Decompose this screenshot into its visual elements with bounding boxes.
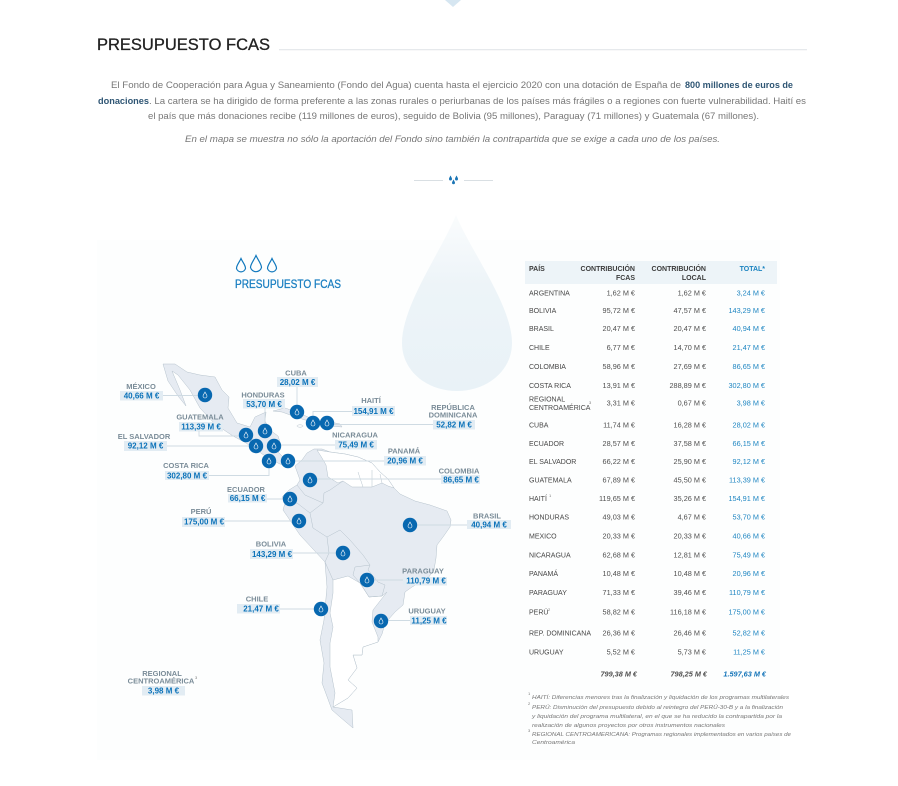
callout: Nicaragua — [267, 430, 378, 453]
row: Panamá: 20,96 M € — [733, 569, 765, 578]
footnotes: HAITÍ: Diferencias menores tras la finalización y liquidación de los programas multilaterales — [532, 694, 789, 701]
table header: LOCAL — [682, 275, 707, 282]
callout: Regional Centroamérica: REGIONAL — [142, 669, 182, 678]
table header: PAÍS — [529, 264, 545, 273]
row: Argentina — [529, 288, 765, 298]
row: México: 40,66 M € — [733, 532, 765, 540]
callout: Ecuador: 66,15 M € — [230, 494, 266, 503]
row: Paraguay: 110,79 M € — [729, 588, 765, 597]
row: Ecuador — [529, 439, 765, 448]
row: Panamá: PANAMÁ — [529, 569, 558, 578]
callout: Bolivia — [250, 540, 350, 560]
row: Regional Centroamérica: 0,67 M € — [678, 398, 706, 408]
row: Rep. Dominicana: 26,36 M € — [603, 628, 635, 638]
row: Regional Centroamérica: CENTROAMÉRICA — [529, 403, 591, 412]
row: Uruguay: URUGUAY — [529, 650, 564, 656]
row: Uruguay — [529, 648, 765, 656]
row: totals: 1.597,63 M € — [723, 670, 767, 678]
row: Brasil: BRASIL — [529, 326, 554, 333]
row: Cuba — [529, 420, 765, 430]
row: Argentina: 1,62 M € — [678, 288, 706, 298]
row: Regional Centroamérica: 3,98 M € — [737, 398, 765, 408]
row: Cuba: 28,02 M € — [733, 420, 765, 430]
row: Cuba: 11,74 M € — [603, 420, 635, 430]
footnotes — [528, 691, 792, 746]
row: Bolivia: 47,57 M € — [674, 306, 706, 315]
row: Bolivia — [529, 306, 765, 315]
callout: Chile: CHILE — [246, 594, 268, 604]
row: Chile: CHILE — [529, 345, 550, 352]
row: Honduras: HONDURAS — [529, 514, 569, 522]
row: Rep. Dominicana: 26,46 M € — [674, 628, 706, 638]
row: El Salvador: EL SALVADOR — [529, 459, 576, 466]
callout: Colombia: 86,65 M € — [443, 476, 479, 484]
callout: Panamá — [281, 446, 426, 468]
row: Argentina: 3,24 M € — [737, 288, 765, 298]
callout: Costa Rica — [163, 454, 276, 480]
callout: República Dominicana: DOMINICANA — [429, 410, 478, 420]
row: Haití: 119,65 M € — [599, 494, 635, 503]
callout: Brasil — [403, 512, 511, 532]
row: Costa Rica: 302,80 M € — [728, 381, 765, 390]
callout: Panamá: PANAMÁ — [388, 446, 421, 456]
row: Guatemala: 113,39 M € — [729, 476, 765, 484]
callout: Paraguay: PARAGUAY — [402, 566, 444, 576]
callout: Honduras: HONDURAS — [241, 390, 285, 400]
row: Nicaragua: 75,49 M € — [733, 550, 765, 560]
row: Uruguay: 11,25 M € — [733, 648, 765, 656]
callout: Regional Centroamérica: CENTROAMÉRICA — [128, 676, 195, 686]
callout: Nicaragua: NICARAGUA — [332, 430, 378, 440]
divider with droplets icon — [414, 176, 493, 184]
row: Brasil: 40,94 M € — [733, 324, 765, 333]
row: Ecuador: ECUADOR — [529, 441, 564, 448]
row: Paraguay: PARAGUAY — [529, 590, 567, 597]
row: Perú: 58,82 M € — [603, 608, 635, 616]
callout: Panamá: 20,96 M € — [387, 456, 423, 466]
row: Regional Centroamérica: 3 — [589, 400, 592, 405]
row: El Salvador — [529, 457, 765, 466]
row: Brasil: 20,47 M € — [603, 324, 635, 333]
callout: El Salvador: EL SALVADOR — [118, 432, 171, 441]
footnotes: 1 — [528, 691, 531, 696]
callout: México — [120, 382, 212, 402]
row: Rep. Dominicana — [529, 628, 765, 638]
italic note: En el mapa se muestra no sólo la aportación del Fondo sino también la contrapartida que se exige a cada uno de los países. — [185, 133, 720, 144]
top pointer triangle — [445, 0, 461, 7]
footnotes: Centroamérica — [532, 740, 576, 746]
callout: El Salvador — [118, 432, 263, 453]
callout: México: MÉXICO — [126, 382, 156, 391]
callout: Costa Rica: COSTA RICA — [163, 461, 209, 470]
row: Bolivia: 143,29 M € — [728, 306, 765, 315]
infographic panel background — [97, 240, 780, 760]
callout: Uruguay — [374, 606, 447, 628]
callout: México: 40,66 M € — [124, 392, 160, 400]
callout: Guatemala: 113,39 M € — [181, 422, 221, 432]
callout: Chile — [237, 594, 328, 616]
row: Uruguay: 5,52 M € — [607, 648, 635, 656]
row: Perú: 116,18 M € — [670, 608, 706, 616]
row: Perú: 2 — [548, 607, 551, 612]
footnotes: 2 — [528, 701, 531, 706]
table header: TOTAL* — [740, 266, 765, 273]
row: Costa Rica: 13,91 M € — [603, 381, 635, 390]
table header: FCAS — [616, 275, 635, 282]
row: Panamá: 10,48 M € — [603, 569, 635, 578]
row: Nicaragua — [529, 550, 765, 560]
row: El Salvador: 25,90 M € — [674, 457, 706, 466]
callout: Bolivia: BOLIVIA — [256, 540, 287, 548]
row: Rep. Dominicana: 52,82 M € — [733, 628, 765, 638]
row: Guatemala — [529, 476, 765, 484]
row: Chile: 6,77 M € — [607, 343, 635, 352]
callout: Cuba: CUBA — [285, 368, 307, 378]
panel title with three drops: PRESUPUESTO FCAS — [235, 277, 341, 291]
row: Chile: 14,70 M € — [674, 343, 706, 352]
row: Costa Rica: 288,89 M € — [669, 381, 706, 390]
callout: Uruguay: URUGUAY — [408, 606, 446, 616]
callout: Cuba: 28,02 M € — [280, 378, 316, 387]
row: Honduras: 53,70 M € — [733, 512, 765, 522]
table header — [525, 261, 777, 284]
callout: Bolivia: 143,29 M € — [252, 550, 293, 559]
row: Haití — [529, 493, 765, 503]
callout: Uruguay: 11,25 M € — [411, 616, 447, 626]
row: totals: 798,25 M € — [670, 670, 708, 678]
row: Argentina: 1,62 M € — [607, 288, 635, 298]
intro text block: donaciones — [98, 95, 149, 106]
row: Honduras: 49,03 M € — [603, 512, 635, 522]
callout: El Salvador: 92,12 M € — [128, 442, 164, 450]
row: Haití: HAITÍ — [529, 494, 547, 503]
row: Brasil: 20,47 M € — [674, 324, 706, 333]
row: México: 20,33 M € — [674, 532, 706, 540]
row: Rep. Dominicana: REP. DOMINICANA — [529, 630, 591, 638]
callout: Haití — [306, 396, 395, 430]
callout: Regional Centroamérica — [128, 669, 198, 696]
row: Haití: 1 — [549, 493, 552, 498]
callout: Guatemala: GUATEMALA — [176, 412, 224, 422]
row: El Salvador: 92,12 M € — [733, 457, 765, 466]
row: Honduras — [529, 512, 765, 522]
callout: Colombia: COLOMBIA — [439, 466, 480, 476]
intro text block: El Fondo de Cooperación para Agua y Saneamiento (Fondo del Agua) cuenta hasta el ejercicio 2020 con una dotación de España de — [111, 79, 681, 90]
callout: Colombia — [303, 466, 480, 487]
row: Costa Rica: COSTA RICA — [529, 383, 571, 390]
callout: Haití: 154,91 M € — [353, 407, 394, 416]
row: Paraguay: 39,46 M € — [674, 588, 706, 597]
callout: República Dominicana: REPÚBLICA — [431, 403, 475, 412]
panel title with three drops — [235, 256, 341, 291]
footnotes: REGIONAL CENTROAMERICANA: Programas regionales implementados en varios países de — [532, 732, 792, 738]
callout: Perú: 175,00 M € — [184, 518, 225, 526]
callout: Regional Centroamérica: 3,98 M € — [148, 686, 180, 696]
row: Uruguay: 5,73 M € — [678, 648, 706, 656]
callout: Honduras — [241, 390, 285, 438]
callout: Regional Centroamérica: 3 — [195, 675, 198, 680]
row: Bolivia: BOLIVIA — [529, 308, 557, 315]
callout: República Dominicana — [320, 403, 478, 430]
row: Honduras: 4,67 M € — [678, 512, 706, 522]
row: Ecuador: 37,58 M € — [674, 439, 706, 448]
row: Nicaragua: 12,81 M € — [674, 550, 706, 560]
callout: Costa Rica: 302,80 M € — [167, 472, 208, 480]
intro text block: el país que más donaciones recibe (119 millones de euros), seguido de Bolivia (95 millones), Paraguay (71 millones) y Guatemala (67 millones). — [148, 110, 759, 121]
intro text block: 800 millones de euros de — [685, 79, 793, 90]
row: México: 20,33 M € — [603, 532, 635, 540]
callout: Nicaragua: 75,49 M € — [338, 440, 374, 450]
row: Bolivia: 95,72 M € — [603, 306, 635, 315]
intro text block — [98, 79, 806, 121]
row: Colombia: 58,96 M € — [603, 362, 635, 371]
row: Panamá — [529, 569, 765, 578]
row: México — [529, 532, 765, 540]
row: Perú: 175,00 M € — [728, 608, 765, 616]
row: El Salvador: 66,22 M € — [603, 457, 635, 466]
row: Guatemala: GUATEMALA — [529, 478, 572, 484]
row: Guatemala: 45,50 M € — [674, 476, 706, 484]
callout: Paraguay: 110,79 M € — [406, 576, 446, 586]
row: Costa Rica — [529, 381, 765, 390]
large background water drop — [402, 215, 512, 391]
callout: Cuba — [277, 368, 318, 419]
row: Nicaragua: 62,68 M € — [603, 550, 635, 560]
row: Haití: 154,91 M € — [728, 494, 765, 503]
row: Colombia: COLOMBIA — [529, 364, 566, 371]
row: Perú: PERÚ — [529, 608, 548, 616]
row: Brasil — [529, 324, 765, 333]
row: Ecuador: 66,15 M € — [733, 439, 765, 448]
callout: Brasil: 40,94 M € — [471, 520, 507, 530]
footnotes: realización de algunos proyectos por otros instrumentos nacionales — [532, 723, 725, 729]
row: Perú — [529, 607, 765, 616]
intro text block: . La cartera se ha dirigido de forma preferente a las zonas rurales o periurbanas de los países más frágiles o a regiones con fuerte vulnerabilidad. Haití es — [149, 95, 806, 106]
callout: República Dominicana: 52,82 M € — [436, 420, 472, 430]
callout: Paraguay — [360, 566, 447, 587]
callout: Perú: PERÚ — [191, 507, 211, 516]
table rows — [529, 288, 767, 678]
row: Panamá: 10,48 M € — [674, 569, 706, 578]
row: Chile — [529, 343, 765, 352]
row: Regional Centroamérica: REGIONAL — [529, 396, 565, 404]
row: Paraguay — [529, 588, 765, 597]
footnotes: PERÚ: Disminución del presupuesto debido al reintegro del PERÚ-30-B y a la finalización — [532, 704, 783, 711]
row: Haití: 35,26 M € — [674, 494, 706, 503]
row: Chile: 21,47 M € — [733, 343, 765, 352]
callout: Ecuador: ECUADOR — [227, 485, 266, 494]
row: Paraguay: 71,33 M € — [603, 588, 635, 597]
row: Colombia — [529, 362, 765, 371]
row: Argentina: ARGENTINA — [529, 290, 570, 298]
table header: CONTRIBUCIÓN — [652, 264, 706, 273]
row: Guatemala: 67,89 M € — [603, 476, 635, 484]
callout: Haití: HAITÍ — [361, 396, 382, 405]
footnotes: 3 — [528, 728, 531, 733]
row: Cuba: 16,28 M € — [674, 420, 706, 430]
map of Latin America — [163, 364, 451, 728]
table header: CONTRIBUCIÓN — [581, 264, 635, 273]
row: Nicaragua: NICARAGUA — [529, 552, 571, 560]
callout: Chile: 21,47 M € — [243, 604, 279, 614]
callout: Brasil: BRASIL — [473, 512, 501, 520]
row: totals: 799,38 M € — [600, 670, 638, 678]
row: Colombia: 86,65 M € — [733, 362, 765, 371]
row: Colombia: 27,69 M € — [674, 362, 706, 371]
row: Cuba: CUBA — [529, 422, 549, 430]
row: Ecuador: 28,57 M € — [603, 439, 635, 448]
row: Regional Centroamérica — [529, 396, 765, 412]
heading: PRESUPUESTO FCAS — [97, 36, 270, 54]
callout: Perú — [182, 507, 306, 528]
callout: Guatemala — [176, 412, 253, 442]
callout: Ecuador — [227, 485, 297, 506]
row: totals — [600, 670, 767, 678]
row: Regional Centroamérica: 3,31 M € — [607, 398, 635, 408]
callout: Honduras: 53,70 M € — [246, 400, 282, 409]
row: México: MEXICO — [529, 534, 557, 540]
footnotes: y liquidación del programa multilateral, en el que se ha reducido la contrapartida por la — [531, 714, 783, 720]
